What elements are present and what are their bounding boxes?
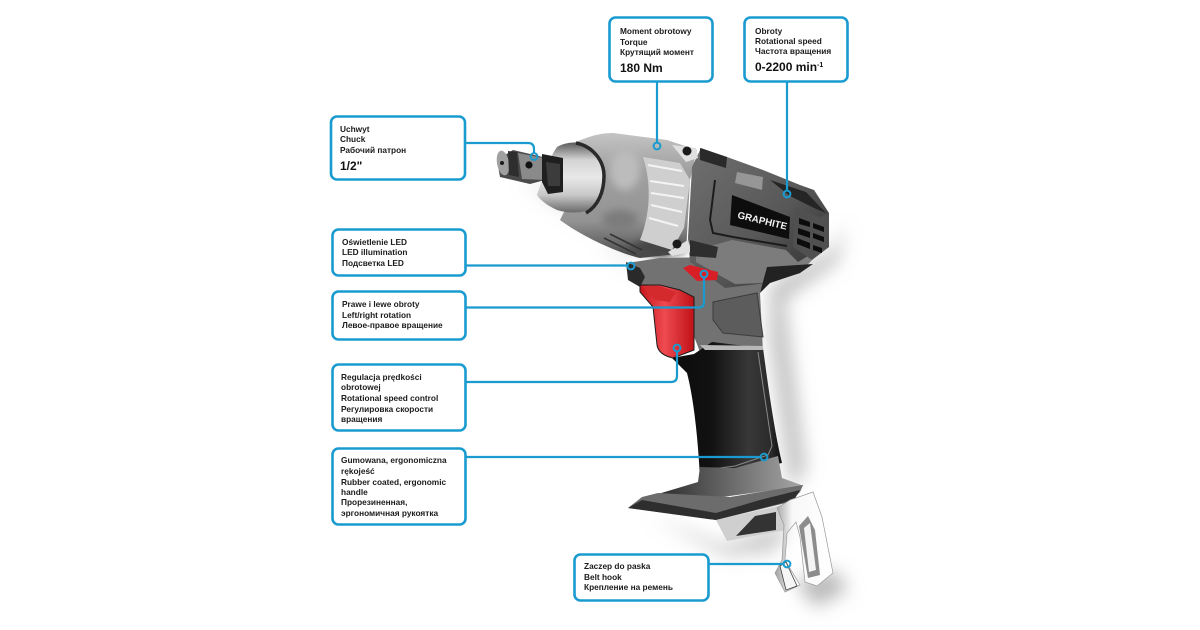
vents [793, 208, 829, 260]
callout: torque [610, 18, 712, 82]
case shading [602, 150, 686, 258]
callout: rotational speed: -1 [817, 62, 823, 69]
callout: rotation: Left/right rotation [342, 310, 411, 320]
callout: LED: Oświetlenie LED [342, 237, 407, 247]
grip highlight band [700, 345, 763, 350]
rotation switch [683, 265, 718, 281]
case ribs [648, 165, 684, 226]
panel groove [710, 180, 787, 246]
grip outline [704, 352, 772, 470]
callout: chuck: Uchwyt [340, 124, 370, 134]
callout: speed control: Rotational speed control [341, 393, 438, 403]
light rib panel [640, 157, 690, 250]
logo panel [730, 195, 790, 239]
connector: speed control [466, 345, 680, 382]
belt hook [775, 492, 833, 592]
trigger [640, 285, 694, 358]
callout: grip: Rubber coated, ergonomic [341, 477, 446, 487]
callout: rotation: Prawe i lewe obroty [342, 299, 420, 309]
callout: torque: Крутящий момент [620, 47, 694, 57]
callout: speed control: Регулировка скорости [341, 404, 433, 414]
callout: rotational speed: Obroty [755, 26, 783, 36]
callout: belt hook: Zaczep do paska [584, 561, 651, 571]
rear motor housing [688, 148, 829, 288]
callout: belt hook [574, 554, 708, 600]
callout: rotational speed: Частота вращения [755, 46, 831, 56]
connector: LED [466, 263, 634, 269]
callout: speed control: Regulacja prędkości [341, 372, 422, 382]
LED housing [626, 262, 645, 287]
connector: rotational speed [784, 82, 790, 197]
callout: rotational speed [744, 18, 848, 82]
callout: chuck: Рабочий патрон [340, 145, 406, 155]
anvil and socket [495, 150, 563, 194]
base [628, 485, 803, 520]
callout: belt hook: Belt hook [584, 572, 622, 582]
callout: rotational speed: 0-2200 min [755, 60, 817, 74]
callout: chuck [331, 116, 465, 180]
callout: grip: Gumowana, ergonomiczna [341, 455, 447, 465]
lower housing band [696, 240, 826, 284]
callout: grip: handle [341, 487, 368, 497]
tool drop shadow [520, 180, 848, 607]
callout: grip [332, 448, 466, 524]
callout: grip: rękojeść [341, 466, 375, 476]
logo panel: GRAPHITE [736, 210, 789, 233]
connector: rotation switch [466, 271, 707, 308]
callout: torque: Torque [620, 37, 648, 47]
callout: LED [332, 230, 466, 276]
connector: chuck [465, 143, 537, 160]
connector: belt hook [709, 561, 790, 567]
top detail [700, 148, 727, 168]
handle side plate [713, 293, 763, 337]
callout: chuck: Chuck [340, 134, 366, 144]
callout: grip: Прорезиненная, [341, 497, 407, 507]
callout: torque: 180 Nm [620, 61, 663, 75]
callout: belt hook: Крепление на ремень [584, 582, 673, 592]
handle neck [627, 257, 763, 352]
dark underside of housing [760, 264, 813, 293]
callout: speed control [332, 364, 466, 430]
callout: rotation [332, 292, 466, 340]
connector: torque [654, 82, 660, 149]
callout: LED: Подсветка LED [342, 258, 404, 268]
silver foot plate [716, 502, 795, 541]
callout: grip: эргономичная рукоятка [341, 508, 438, 518]
callout: LED: LED illumination [342, 247, 407, 257]
nose cone [537, 142, 604, 213]
lower case ribs [604, 234, 642, 254]
callout: chuck: 1/2" [340, 159, 362, 173]
callout: torque: Moment obrotowy [620, 26, 692, 36]
illustration: impact wrench [495, 133, 833, 592]
base neck [658, 456, 804, 500]
callout: speed control: obrotowej [341, 382, 381, 392]
callout: rotation: Левое-правое вращение [342, 320, 443, 330]
screws [668, 145, 718, 258]
callout: speed control: вращения [341, 414, 383, 424]
rubber grip [672, 342, 782, 478]
hammer case [560, 133, 697, 258]
connector: grip [466, 454, 767, 460]
callout: rotational speed: Rotational speed [755, 36, 822, 46]
